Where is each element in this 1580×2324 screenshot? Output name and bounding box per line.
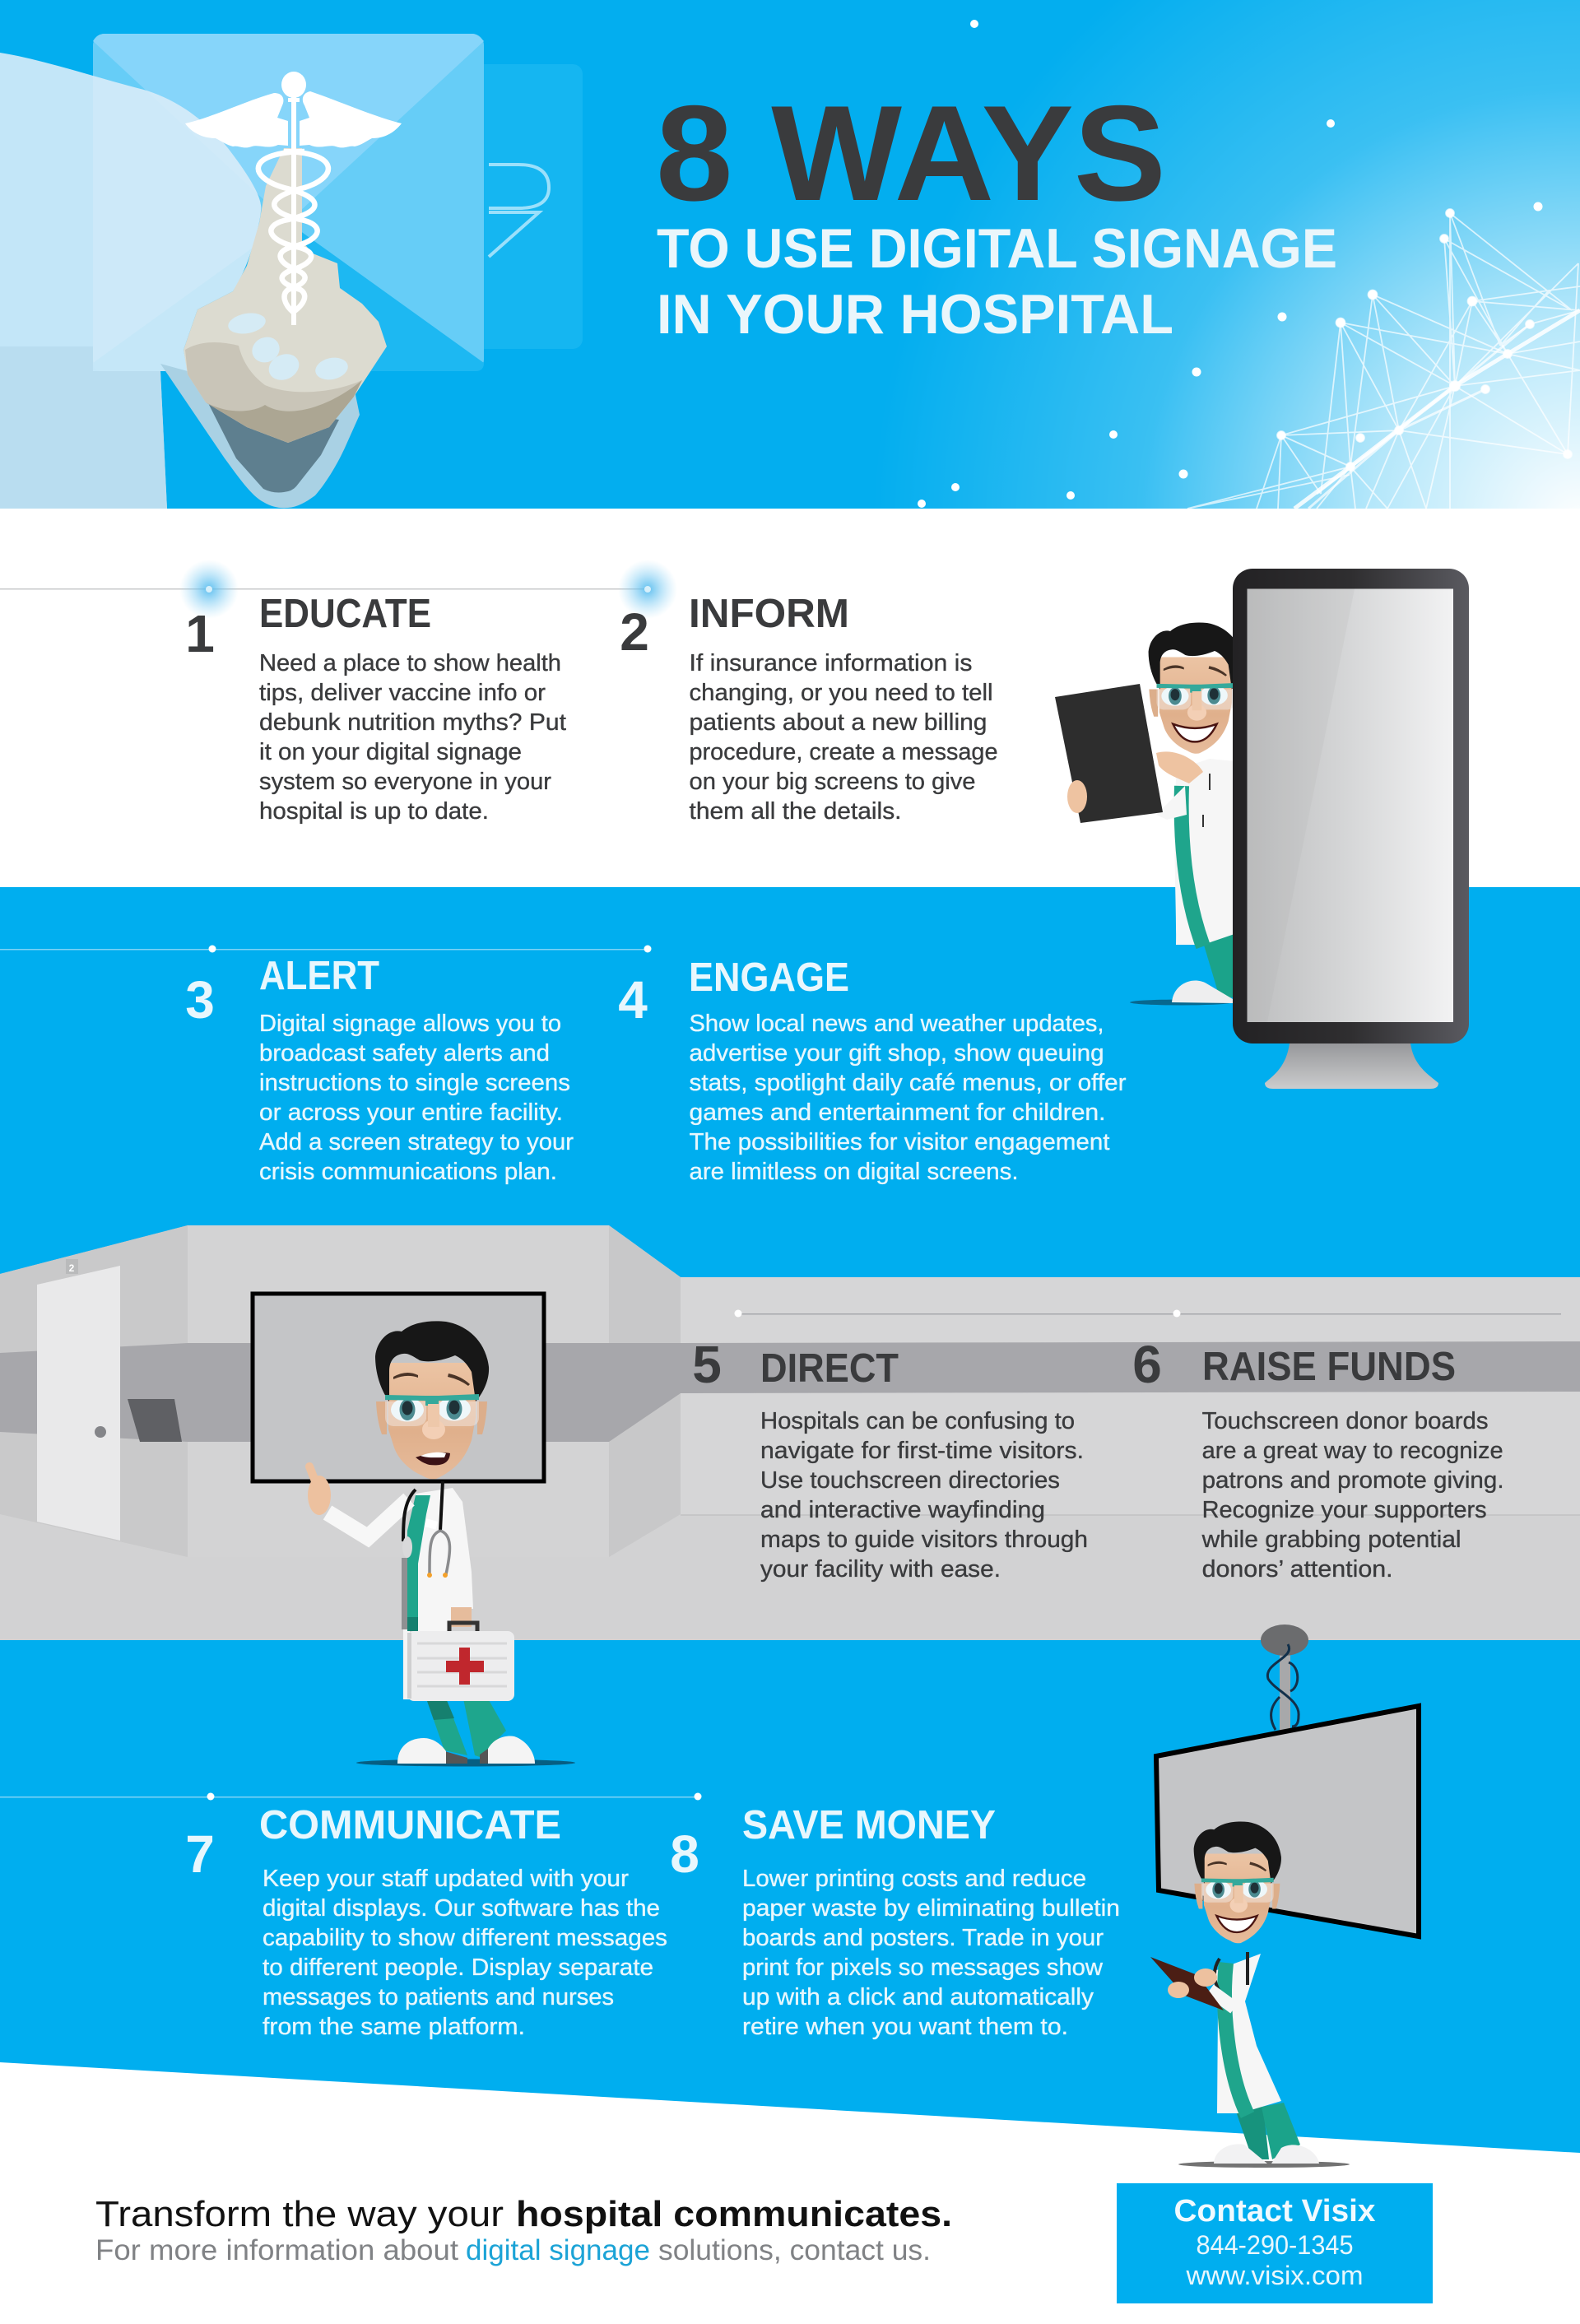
contact box <box>1117 2183 1433 2303</box>
hand on handle <box>451 1607 472 1627</box>
item 2: inform: INFORM <box>689 592 849 636</box>
item 3: alert: 3 <box>185 970 215 1030</box>
item 5: direct: maps to guide visitors through <box>760 1527 1088 1553</box>
shoes <box>442 1750 467 1764</box>
star dots <box>918 20 1542 508</box>
coat lower strip <box>403 1629 410 1699</box>
stethoscope <box>403 1481 443 1541</box>
item 6: raise funds: are a great way to recognize <box>1202 1438 1503 1464</box>
item 2: inform: them all the details. <box>690 798 902 825</box>
kiosk monitor <box>1233 569 1469 1089</box>
item 4: engage: Show local news and weather updates, <box>690 1011 1104 1037</box>
item 7: communicate: to different people. Display separate <box>263 1954 653 1981</box>
item 2: inform: on your big screens to give <box>690 769 976 795</box>
item 2: inform: procedure, create a message <box>690 739 997 765</box>
footer tagline: solutions, contact us. <box>658 2234 931 2266</box>
title: 8 WAYS <box>656 77 1166 229</box>
item 4: engage: are limitless on digital screens. <box>690 1159 1019 1185</box>
item 6: raise funds: Recognize your supporters <box>1202 1497 1487 1523</box>
item 5: direct: and interactive wayfinding <box>760 1497 1045 1523</box>
item 7: communicate: digital displays. Our software has the <box>263 1895 660 1922</box>
item 5: direct: your facility with ease. <box>760 1556 1001 1583</box>
item 8: save money: boards and posters. Trade in your <box>742 1925 1104 1951</box>
item 1: educate: EDUCATE <box>259 592 431 636</box>
item 3: alert <box>185 954 574 1185</box>
item 3: alert: Digital signage allows you to <box>259 1011 561 1037</box>
title <box>656 77 1337 346</box>
back panel <box>329 64 583 349</box>
item 8: save money: Lower printing costs and reduce <box>742 1866 1086 1892</box>
contact box: www.visix.com <box>1185 2261 1363 2290</box>
item 1: educate: it on your digital signage <box>259 739 522 765</box>
title: IN YOUR HOSPITAL <box>657 283 1173 346</box>
item 4: engage: games and entertainment for children. <box>690 1099 1106 1126</box>
footer tagline <box>95 2194 952 2266</box>
item 4: engage: The possibilities for visitor engagement <box>690 1129 1109 1155</box>
footer tagline: hospital communicates. <box>516 2194 952 2234</box>
item 1: educate: hospital is up to date. <box>259 798 489 825</box>
item 5: direct: Hospitals can be confusing to <box>760 1408 1075 1434</box>
item 3: alert: crisis communications plan. <box>259 1159 557 1185</box>
item 6: raise funds <box>1132 1335 1504 1583</box>
item 2: inform: If insurance information is <box>690 650 973 676</box>
icon: caduceus <box>185 72 402 325</box>
first aid case <box>407 1623 514 1701</box>
wall dispenser <box>128 1399 182 1442</box>
item 1: educate: system so everyone in your <box>259 769 551 795</box>
legs <box>426 1699 467 1755</box>
item 8: save money: 8 <box>670 1824 699 1884</box>
panel: item rule lines <box>0 560 1561 1801</box>
item 8: save money: print for pixels so messages show <box>742 1954 1104 1981</box>
sleeve <box>0 53 261 509</box>
panel: hero header <box>0 0 1580 509</box>
item 3: alert: instructions to single screens <box>259 1070 570 1096</box>
title: TO USE DIGITAL SIGNAGE <box>657 217 1337 280</box>
item 8: save money <box>670 1803 1120 2040</box>
panel: corridor <box>0 1225 1580 1640</box>
doctor peeking behind monitor <box>1055 622 1243 1006</box>
item 2: inform: patients about a new billing <box>690 709 988 736</box>
item 3: alert: ALERT <box>259 954 379 998</box>
contact box: 844-290-1345 <box>1197 2230 1353 2260</box>
blue background band <box>0 887 1580 2153</box>
item 3: alert: Add a screen strategy to your <box>259 1129 574 1155</box>
item 4: engage: ENGAGE <box>689 955 849 1000</box>
ceiling mounted screen <box>1156 1624 1419 1936</box>
item 3: alert: broadcast safety alerts and <box>259 1040 550 1067</box>
item 2: inform: 2 <box>620 602 649 662</box>
item 1: educate: 1 <box>185 604 215 663</box>
door: 2 <box>69 1262 75 1274</box>
footer tagline: digital signage <box>466 2234 650 2266</box>
tablet <box>1055 684 1163 823</box>
hand <box>184 148 387 443</box>
contact box: Contact Visix <box>1173 2194 1376 2229</box>
item 4: engage <box>618 955 1127 1185</box>
item 5: direct: DIRECT <box>760 1346 899 1391</box>
item 7: communicate <box>185 1803 667 2040</box>
item 8: save money: up with a click and automatically <box>742 1984 1094 2010</box>
door <box>37 1259 120 1541</box>
touch panel <box>93 34 484 371</box>
item 3: alert: or across your entire facility. <box>259 1099 563 1126</box>
item 1: educate: debunk nutrition myths? Put <box>259 709 566 736</box>
item 4: engage: advertise your gift shop, show queuing <box>690 1040 1104 1067</box>
item 1: educate: Need a place to show health <box>259 650 561 676</box>
item 7: communicate: COMMUNICATE <box>259 1803 561 1848</box>
item 6: raise funds: RAISE FUNDS <box>1202 1345 1456 1389</box>
item 7: communicate: messages to patients and nurses <box>263 1984 614 2010</box>
item 1: educate <box>185 592 566 825</box>
wall strip <box>0 1341 1580 1442</box>
item 5: direct: Use touchscreen directories <box>760 1467 1060 1494</box>
corridor screen <box>253 1294 544 1481</box>
item 4: engage: 4 <box>618 970 648 1030</box>
item 6: raise funds: donors’ attention. <box>1202 1556 1393 1583</box>
footer tagline: Transform the way your <box>95 2194 504 2234</box>
item 4: engage: stats, spotlight daily café menus, or offer <box>690 1070 1127 1096</box>
item 8: save money: retire when you want them to. <box>742 2014 1068 2040</box>
item 5: direct <box>692 1335 1088 1583</box>
item 6: raise funds: while grabbing potential <box>1201 1527 1462 1553</box>
icon: outline D symbol <box>489 165 549 257</box>
item 1: educate: tips, deliver vaccine info or <box>259 680 546 706</box>
cuff <box>160 364 360 508</box>
network graphic <box>1187 209 1580 509</box>
item 6: raise funds: patrons and promote giving. <box>1202 1467 1504 1494</box>
item 7: communicate: 7 <box>185 1824 215 1884</box>
footer shadow <box>1178 2161 1350 2168</box>
doctor with clipboard <box>1150 1821 1319 2164</box>
item 7: communicate: capability to show different messages <box>263 1925 667 1951</box>
item 2: inform: changing, or you need to tell <box>690 680 992 706</box>
item 7: communicate: Keep your staff updated with your <box>263 1866 629 1892</box>
item 2: inform <box>620 592 997 825</box>
item 6: raise funds: Touchscreen donor boards <box>1202 1408 1489 1434</box>
item 7: communicate: from the same platform. <box>263 2014 525 2040</box>
item 8: save money: SAVE MONEY <box>742 1803 996 1848</box>
item 5: direct: navigate for first-time visitors. <box>760 1438 1084 1464</box>
item 5: direct: 5 <box>692 1335 722 1394</box>
footer tagline: For more information about <box>95 2234 458 2266</box>
doctor with first aid case <box>308 1321 575 1766</box>
item 6: raise funds: 6 <box>1132 1335 1162 1394</box>
item 8: save money: paper waste by eliminating bulletin <box>742 1895 1120 1922</box>
